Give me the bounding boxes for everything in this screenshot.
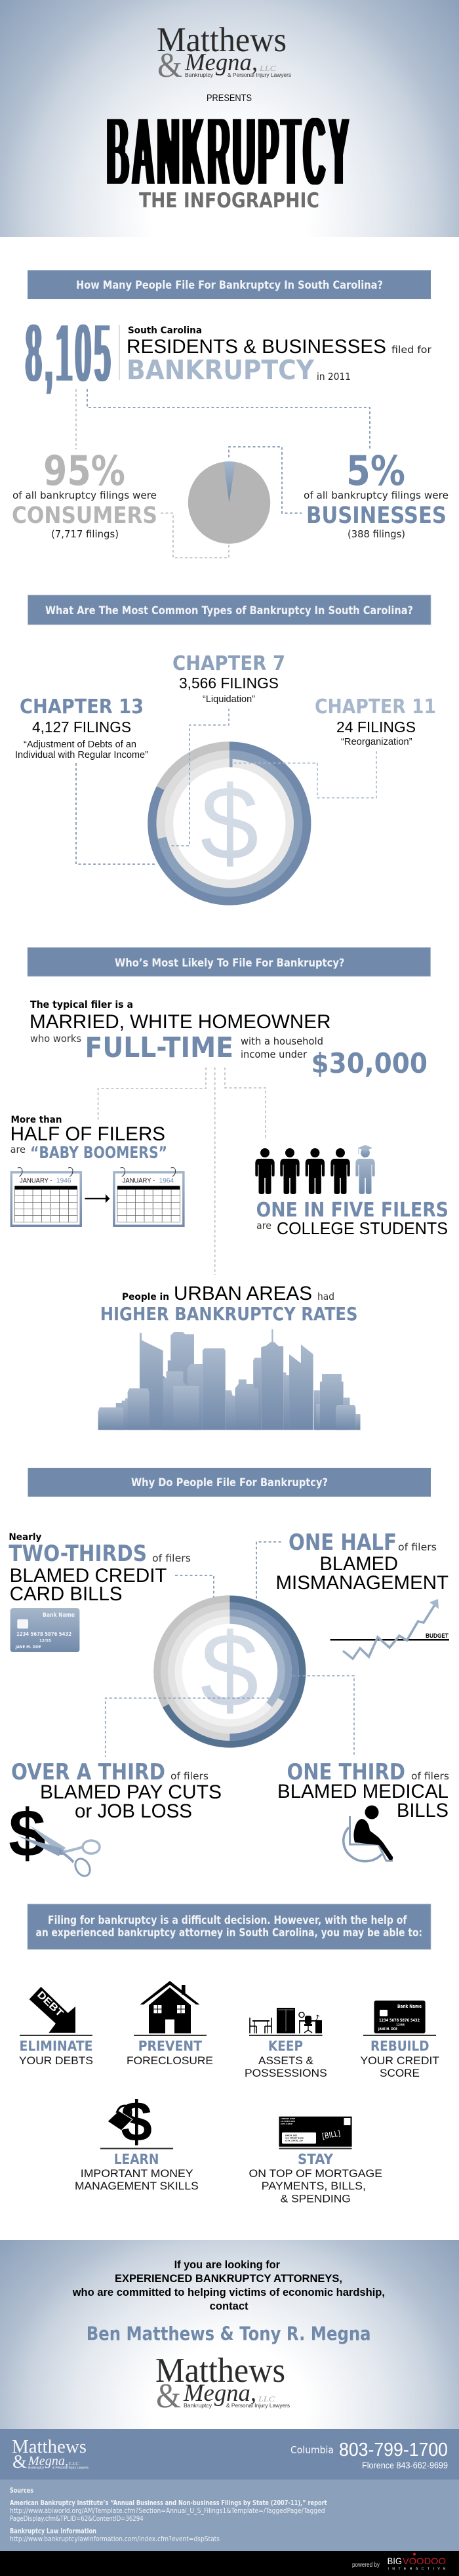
contact panel [0,2240,459,2429]
businesses stat [304,447,449,540]
logo: Bankruptcy [185,72,214,78]
headline text: filed for [391,344,432,356]
chapter 7: CHAPTER 7 [172,652,285,675]
logo [155,2352,290,2415]
college students text: COLLEGE STUDENTS [277,1220,448,1238]
call to action [72,2258,385,2312]
chapter 13: “Adjustment of Debts of an [24,739,136,750]
benefit: rebuild credit: YOUR CREDIT [361,2054,439,2067]
benefit: prevent foreclosure: FORECLOSURE [127,2054,213,2067]
college students text [256,1199,449,1238]
icon: calendar 1964: 1964 [159,1177,174,1185]
reason: mismanagement: MISMANAGEMENT [275,1572,449,1594]
credits bar [0,2551,459,2576]
sources panel [0,2480,459,2551]
reason: mismanagement: of filers [398,1541,437,1553]
arrow [85,1194,110,1203]
logo: Matthews [155,2352,285,2390]
icon: calendar 1946 [10,1168,82,1227]
chapter 7 [172,652,285,705]
baby boomers text: “BABY BOOMERS” [30,1143,167,1162]
reason: credit card bills: BLAMED CREDIT [10,1565,167,1587]
sources panel: http://www.abiworld.org/AM/Template.cfm?Section=Annual_U_S_Filings1&Template=/TaggedPage/Tagged [10,2507,325,2515]
icon: black credit card: JANE M. DOE [378,2027,397,2031]
benefit: stay on top: PAYMENTS, BILLS, [262,2180,366,2192]
logo: Megna, [183,2380,256,2407]
benefit: rebuild credit [361,2001,439,2079]
benefit: stay on top: ON TOP OF MORTGAGE [249,2167,382,2180]
phone numbers: Columbia [290,2444,334,2456]
benefit: keep assets: KEEP [268,2039,303,2055]
benefit: stay on top: & SPENDING [281,2193,351,2205]
typical filer text: who works [30,1033,81,1045]
reason: medical bills [277,1759,449,1821]
section heading: difficult decision: Filing for bankruptcy is a difficult decision. However, with the help of [48,1914,407,1926]
phone numbers: Florence 843-662-9699 [362,2461,448,2470]
benefit: prevent foreclosure: PREVENT [138,2039,202,2055]
icon: bill envelope [279,2117,352,2147]
icon: dollar with padlock: $ [121,2090,152,2153]
reason: credit card bills: Nearly [9,1532,42,1543]
section heading: types: What Are The Most Common Types of Bankruptcy In South Carolina? [45,604,413,617]
logo: Matthews [157,21,287,59]
typical filer text: income under [241,1049,308,1060]
credits bar: VOODOO [403,2556,446,2566]
benefit: stay on top: STAY [298,2151,333,2168]
phone numbers: 803-799-1700 [339,2440,448,2461]
baby boomers text: HALF OF FILERS [10,1123,165,1145]
chapter 11 [315,696,436,747]
businesses stat: of all bankruptcy filings were [304,489,449,501]
logo: Bankruptcy [184,2402,212,2409]
presents: PRESENTS [207,93,252,104]
logo: & Personal Injury Lawyers [226,2402,290,2409]
ring chart: chapters [148,741,311,905]
sources panel: PageDisplay.cfm&TPLID=62&ContentID=36294 [10,2515,144,2523]
white logo: & Personal Injury Lawyers [52,2466,89,2470]
icon: bill envelope: 123 STREET NAME [281,2120,295,2123]
typical filer text: MARRIED, WHITE HOMEOWNER [30,1011,330,1033]
businesses stat: (388 filings) [348,528,405,540]
urban areas text: URBAN AREAS [174,1283,312,1304]
typical filer text: $30,000 [311,1047,428,1079]
icon: bill envelope: CITY, STATE, ZIP [285,2139,304,2142]
reason: medical bills: BLAMED MEDICAL [277,1781,449,1802]
icon: credit card [10,1608,79,1652]
benefit: rebuild credit: REBUILD [370,2039,429,2055]
urban areas text: HIGHER BANKRUPTCY RATES [100,1304,357,1325]
typical filer text: FULL-TIME [85,1032,233,1064]
icon: bill envelope: JANE M. DOE [285,2134,297,2136]
consumers stat: CONSUMERS [12,503,157,529]
attorney names: Ben Matthews & Tony R. Megna [87,2323,371,2345]
baby boomers text: More than [10,1115,62,1125]
icon: black credit card [374,2001,426,2033]
icon: scissors cutting dollar [9,1796,100,1879]
subtitle: THE INFOGRAPHIC [139,189,319,213]
headline text: South Carolina [128,325,202,336]
reason: pay cuts: of filers [170,1770,209,1782]
headline text: in 2011 [317,371,351,383]
logo: LLC [258,2394,275,2403]
panel: filings total: 8,105 [26,304,113,401]
white logo [12,2437,89,2472]
sources panel: Sources [10,2487,33,2495]
reason: medical bills: of filers [411,1770,449,1782]
white logo: Megna, [28,2454,68,2468]
benefit: stay on top [249,2117,382,2205]
headline text: BANKRUPTCY [127,354,315,386]
logo: & Personal Injury Lawyers [228,72,291,78]
sources panel: http://www.bankruptcylawinformation.com/index.cfm?event=dspStats [10,2535,220,2543]
headline text: RESIDENTS & BUSINESSES [127,336,386,358]
icon: wheelchair [344,1806,393,1861]
reason: pay cuts: OVER A THIRD [11,1759,165,1785]
section heading: why [28,1468,431,1497]
reason: pay cuts: or JOB LOSS [75,1800,192,1822]
typical filer text: The typical filer is a [30,999,133,1010]
benefit: eliminate debts: YOUR DEBTS [19,2054,93,2067]
white logo: Matthews [12,2437,87,2457]
phone numbers [290,2440,448,2470]
icon: credit card: Bank Name [43,1612,75,1619]
sources panel: American Bankruptcy Institute’s “Annual Business and Non-business Filings by State (2007-11),” report [10,2499,327,2507]
icon: calendar 1946: JANUARY - [20,1177,52,1185]
section heading: how many: How Many People File For Bankruptcy In South Carolina? [76,279,383,291]
chapter 7: “Liquidation” [203,694,255,705]
urban areas text [100,1283,357,1325]
benefit: learn skills: IMPORTANT MONEY [81,2167,193,2180]
headline text [127,325,432,386]
chapter 11: 24 FILINGS [336,718,416,736]
call to action: If you are looking for [174,2258,280,2271]
icon: black credit card: Bank Name [397,2004,422,2009]
icon: bill envelope: COMPANY NAME [281,2117,295,2120]
chapter 13: Individual with Regular Income” [15,750,148,760]
icon: calendar 1946: 1946 [56,1177,71,1185]
icon: house [140,1981,199,2033]
call to action: EXPERIENCED BANKRUPTCY ATTORNEYS, [115,2272,342,2285]
call to action: contact [210,2300,249,2312]
reason: credit card bills: TWO-THIRDS [9,1541,147,1566]
icon: bill envelope: CITY, STATE [281,2123,292,2125]
consumers stat: 95% [43,447,125,495]
footer contact bar [0,2429,459,2480]
reason: mismanagement [275,1529,449,1594]
benefit: keep assets: POSSESSIONS [245,2067,327,2079]
icon: furniture [250,2008,322,2033]
skyline [98,1329,361,1430]
typical filer text: with a household [241,1035,323,1047]
chapter 13 [15,696,148,760]
icon: credit card: JANE M. DOE [15,1644,41,1650]
icon: five people [255,1145,375,1194]
reason: medical bills: BILLS [397,1800,449,1821]
call to action: who are committed to helping victims of economic hardship, [72,2286,385,2298]
benefit: eliminate debts [19,1987,93,2067]
white logo: Bankruptcy [28,2466,44,2470]
panel: filings total [26,304,432,401]
benefit: rebuild credit: SCORE [380,2067,420,2079]
logo: LLC [259,64,277,73]
urban areas text: had [317,1291,334,1302]
logo: Megna, [184,49,258,76]
reason: pay cuts [11,1759,222,1822]
reason: medical bills: ONE THIRD [287,1759,405,1785]
section heading: who: Who’s Most Likely To File For Bankruptcy? [115,957,345,969]
icon: credit card: 1234 5678 5876 5432 [16,1631,71,1637]
reason: mismanagement: BLAMED [320,1553,398,1575]
reason: credit card bills: of filers [152,1552,191,1564]
white logo: LLC [68,2461,79,2466]
benefit: learn skills [75,2090,199,2192]
section heading: who [28,947,430,976]
benefit: keep assets: ASSETS & [258,2054,314,2067]
businesses stat: 5% [346,447,405,495]
ring chart: reasons [153,1596,306,1748]
sources panel: Bankruptcy Law Information [10,2527,96,2535]
chapter 11: CHAPTER 11 [315,696,436,718]
icon: calendar 1964: JANUARY - [123,1177,155,1185]
chapter 13: CHAPTER 13 [20,696,144,718]
consumers stat: of all bankruptcy filings were [12,489,157,501]
section heading: why: Why Do People File For Bankruptcy? [131,1476,328,1489]
consumers stat [12,447,157,540]
header panel [0,0,459,237]
chapter 7: 3,566 FILINGS [179,675,279,692]
icon: debt arrow: DEBT [35,1989,66,2020]
chapter 13: 4,127 FILINGS [32,718,131,736]
icon: bill envelope: [BILL] [321,2129,341,2141]
reason: credit card bills: CARD BILLS [10,1583,123,1605]
baby boomers text: are [10,1144,26,1155]
college students text: are [256,1220,271,1232]
pie chart [188,461,270,544]
icon: budget chart: BUDGET [426,1632,449,1639]
logo [157,21,291,85]
typical filer text [30,999,428,1079]
credits bar: powered by [352,2562,380,2569]
section heading: types [28,595,431,625]
reason: pay cuts: BLAMED PAY CUTS [40,1781,222,1803]
chapter 11: “Reorganization” [341,737,412,747]
benefit: prevent foreclosure [127,1981,213,2067]
credits bar: INTERACTIVE [388,2567,446,2571]
baby boomers text [10,1115,167,1162]
icon: calendar 1964 [113,1168,185,1227]
icon: bill envelope: 123 STREET NAME [285,2136,304,2139]
ring chart: chapters: $ [201,764,258,882]
reason: credit card bills [9,1532,191,1605]
white logo: & [12,2452,27,2472]
benefit: learn skills: MANAGEMENT SKILLS [75,2180,199,2192]
icon: black credit card: 12/55 [396,2024,405,2027]
benefit: eliminate debts: ELIMINATE [20,2039,93,2055]
benefit: learn skills: LEARN [114,2151,159,2168]
icon: credit card: 12/55 [39,1639,51,1643]
icon: budget chart [330,1599,449,1659]
logo: & [156,2377,181,2415]
benefit: keep assets [245,2008,327,2079]
icon: black credit card: 1234 5678 5876 5432 [379,2018,420,2023]
section heading: difficult decision [28,1904,431,1949]
logo: & [157,47,182,85]
reason: mismanagement: ONE HALF [289,1529,397,1555]
urban areas text: People in [122,1292,169,1302]
section heading: how many [28,270,431,299]
consumers stat: (7,717 filings) [51,528,119,540]
ring chart: reasons: $ [201,1611,258,1728]
icon: scissors cutting dollar: $ [9,1796,46,1871]
credits bar: BIG [388,2556,402,2566]
